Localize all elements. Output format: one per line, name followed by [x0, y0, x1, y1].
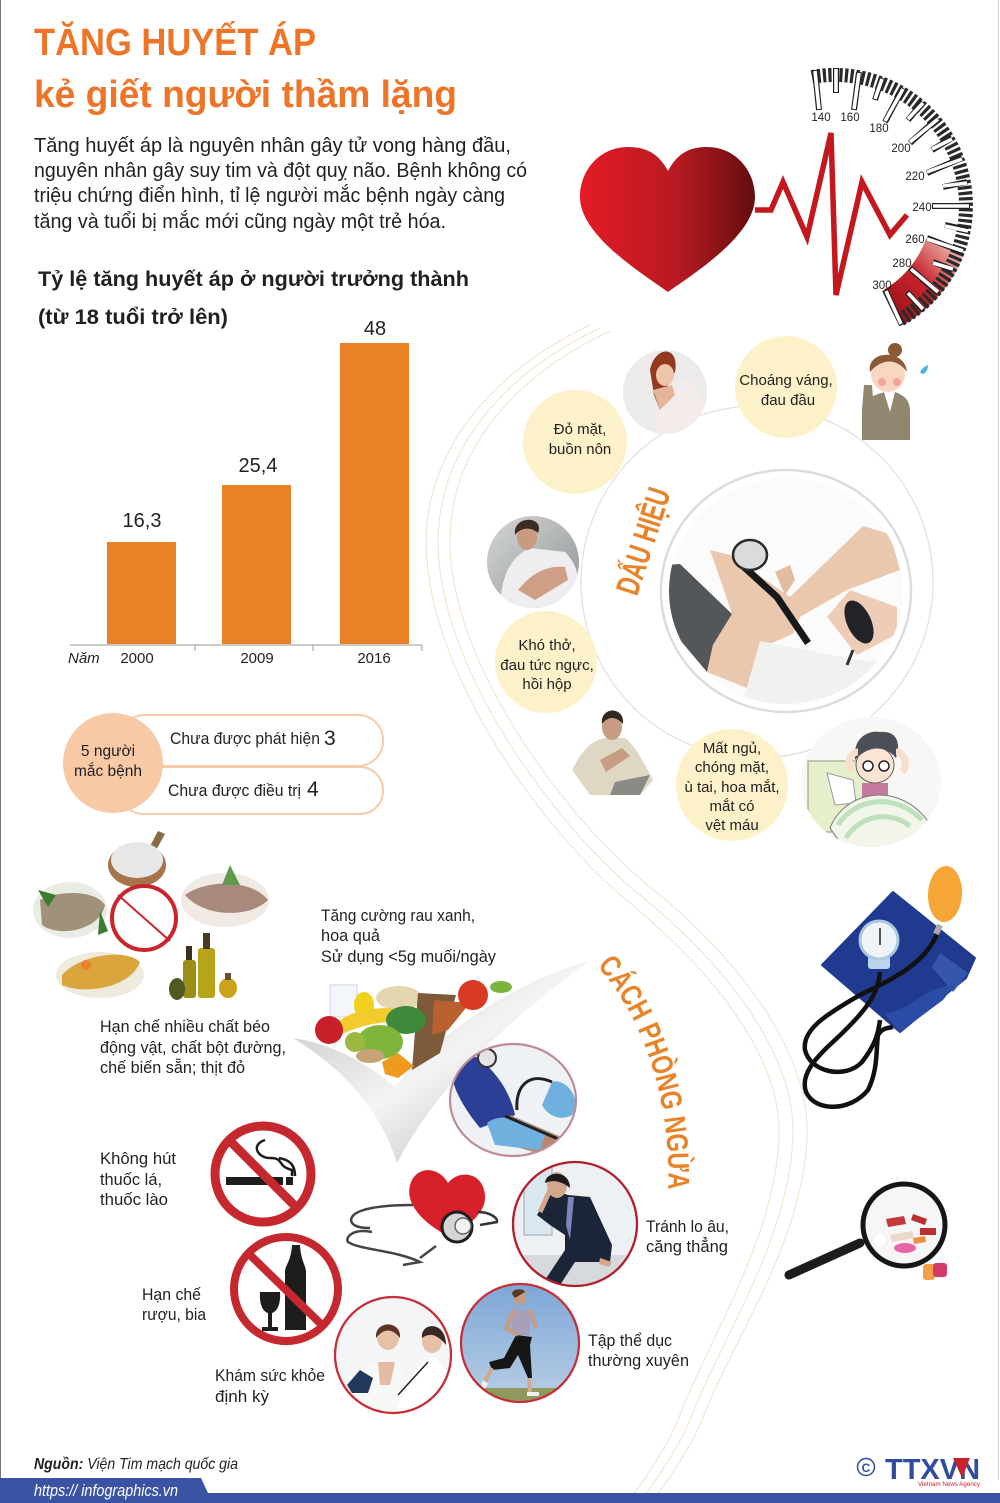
text: exercise: [588, 1332, 689, 1370]
icon: sphygmomanometer: [805, 865, 975, 1107]
text: avoid stress: [646, 1218, 729, 1256]
text: restrict fats: Hạn chế nhiều chất béo: [100, 1018, 270, 1036]
icon: magnifying glass with pills: [789, 1184, 947, 1280]
intro paragraph: nguyên nhân gây suy tim và đột quỵ não. Bệnh không có: [34, 160, 527, 182]
text: regular check-ups: Khám sức khỏe: [215, 1367, 325, 1385]
bar chart: 16,3: [123, 510, 161, 532]
gauge numbers: 180: [869, 123, 889, 135]
salt bowl: [148, 831, 165, 854]
callout: 5 people with hypertension: Chưa được phát hiện: [170, 730, 320, 748]
text: no smoking: thuốc lá,: [100, 1171, 162, 1189]
source note: Nguồn: Viện Tim mạch quốc gia: [34, 1456, 238, 1473]
title: [34, 20, 457, 116]
logo: TTXVN: C: [862, 1461, 871, 1475]
chart heading: [38, 268, 469, 329]
heart: [580, 147, 755, 292]
red zone of gauge: [884, 239, 964, 325]
sleeve: [665, 564, 732, 672]
icon: no smoking: [215, 1126, 311, 1222]
prohibition ring: [112, 886, 176, 950]
logo: TTXVN: TTXVN: [885, 1454, 980, 1486]
icon: check mark with healthy food: [293, 960, 592, 1163]
text: limit alcohol: [142, 1286, 207, 1324]
intro paragraph: [34, 135, 527, 233]
callout: 5 people with hypertension: 3: [324, 727, 336, 750]
gauge numbers: [811, 112, 932, 292]
title: kẻ giết người thầm lặng: [34, 74, 457, 116]
gauge numbers: 200: [891, 143, 911, 155]
bar chart: [68, 318, 422, 667]
text: more vegetables: Tăng cường rau xanh,: [321, 907, 475, 925]
text: no smoking: thuốc lào: [100, 1191, 168, 1209]
yellow bubble: flushed face, nausea: buồn nôn: [549, 441, 611, 458]
yellow bubble: dizziness, headache: đau đầu: [761, 392, 815, 409]
yellow bubble: breathlessness, chest pain: [495, 611, 597, 713]
yellow bubble: insomnia, vertigo: Mất ngủ,: [703, 740, 761, 757]
bar chart: 2000: [120, 650, 154, 667]
text: restrict fats: chế biến sẵn; thịt đỏ: [100, 1058, 245, 1077]
symptoms ring: [581, 406, 933, 758]
photo: doctor checking patient: [335, 1297, 452, 1413]
gauge major ticks: [815, 68, 970, 325]
text: limit alcohol: Hạn chế: [142, 1286, 201, 1304]
yellow bubble: flushed face, nausea: Đỏ mặt,: [554, 421, 606, 438]
photo: sleepless person in bed: [801, 717, 941, 850]
ECG line: [755, 133, 907, 295]
symptoms heading: DẤU HIỆU: [608, 483, 678, 599]
callout: 5 people with hypertension: 5 người: [81, 743, 135, 760]
arm and hand: [707, 526, 900, 688]
callout: 5 people with hypertension: mắc bệnh: [74, 763, 142, 780]
photo: stressed businessman: [512, 1162, 642, 1295]
yellow bubble: dizziness, headache: [735, 336, 837, 438]
gauge numbers: 140: [811, 112, 831, 124]
gauge: [743, 566, 808, 643]
text: regular check-ups: [215, 1367, 325, 1406]
text: more vegetables: [321, 907, 497, 966]
bar chart: Năm: [68, 650, 100, 667]
icon: foods to restrict: [33, 831, 269, 1000]
yellow bubble: insomnia, vertigo: mắt có: [709, 798, 755, 815]
yellow bubble: insomnia, vertigo: vệt máu: [705, 817, 759, 834]
text: limit alcohol: rượu, bia: [142, 1306, 207, 1324]
gauge numbers: 260: [905, 234, 925, 246]
panel: symptoms: [486, 336, 941, 850]
text: restrict fats: [100, 1018, 286, 1077]
title: TĂNG HUYẾT ÁP: [34, 20, 316, 64]
yellow bubble: insomnia, vertigo: [676, 729, 788, 841]
salad plate left: [33, 882, 107, 938]
photo: man with chest pain: [486, 516, 580, 612]
text: regular check-ups: định kỳ: [215, 1388, 270, 1406]
photo: blood pressure measurement: [660, 470, 912, 712]
food pile: [376, 986, 422, 1010]
text: avoid stress: Tránh lo âu,: [646, 1218, 729, 1236]
callout: 5 people with hypertension: 4: [307, 778, 319, 801]
intro paragraph: tăng và tuổi bị mắc mới cũng ngày một trẻ hóa.: [34, 210, 446, 233]
icon: no alcohol: [234, 1237, 338, 1341]
bar chart: 2009: [240, 650, 274, 667]
text: no smoking: Không hút: [100, 1150, 176, 1168]
footer bar with URL: https:// infographics.vn: [34, 1481, 178, 1500]
photo: man coughing at desk: [572, 710, 653, 795]
bar chart: 48: [364, 318, 386, 340]
photo: runner: [460, 1284, 580, 1408]
oil bottles: [198, 948, 215, 998]
yellow bubble: breathlessness, chest pain: đau tức ngực,: [500, 657, 594, 674]
footer bar with URL: [0, 1478, 1000, 1503]
text: exercise: Tập thể dục: [588, 1332, 672, 1350]
callout: 5 people with hypertension: [63, 713, 383, 814]
chicken plate: [56, 952, 144, 998]
yellow bubble: insomnia, vertigo: ù tai, hoa mắt,: [684, 779, 780, 796]
yellow bubble: breathlessness, chest pain: Khó thở,: [518, 637, 576, 654]
gauge numbers: 300: [872, 280, 892, 292]
panel: prevention: [33, 831, 729, 1414]
text: no smoking: [100, 1150, 176, 1209]
text: restrict fats: động vật, chất bột đường,: [100, 1039, 286, 1057]
text: avoid stress: căng thẳng: [646, 1237, 728, 1256]
text: more vegetables: hoa quả: [321, 927, 381, 945]
icon: woman with headache: [862, 343, 928, 440]
gauge numbers: 220: [905, 171, 925, 183]
photo: blood pressure check with gloves: [450, 1044, 580, 1160]
gauge numbers: 240: [912, 202, 932, 214]
text: exercise: thường xuyên: [588, 1352, 689, 1370]
text: more vegetables: Sử dụng <5g muối/ngày: [321, 948, 497, 966]
decorative curved lines: [426, 325, 807, 1503]
prevention heading: CÁCH PHÒNG NGỪA: [600, 956, 695, 1189]
gauge minor ticks: [812, 75, 966, 319]
photo: nauseous woman: [623, 350, 707, 434]
callout: 5 people with hypertension: Chưa được điều trị: [168, 782, 301, 800]
chart heading: Tỷ lệ tăng huyết áp ở người trưởng thành: [38, 268, 469, 291]
icon: heart, ECG and pressure gauge: [580, 68, 970, 325]
right hand: [827, 590, 897, 655]
gauge numbers: 280: [892, 258, 912, 270]
chart heading: (từ 18 tuổi trở lên): [38, 306, 228, 329]
icon: heart with stethoscope: [347, 1170, 497, 1265]
bar chart: 2016: [357, 650, 391, 667]
gauge numbers: 160: [840, 112, 860, 124]
intro paragraph: triệu chứng điển hình, tỉ lệ người mắc bệnh ngày càng: [34, 184, 505, 207]
yellow bubble: breathlessness, chest pain: hồi hộp: [522, 676, 572, 693]
coat: [744, 641, 876, 704]
yellow bubble: dizziness, headache: Choáng váng,: [739, 372, 833, 389]
meat plate right: [181, 873, 269, 927]
yellow bubble: insomnia, vertigo: chóng mặt,: [695, 759, 769, 776]
tubes: [805, 932, 938, 1107]
bar chart: 25,4: [239, 455, 277, 477]
intro paragraph: Tăng huyết áp là nguyên nhân gây tử vong hàng đầu,: [34, 135, 511, 157]
logo: TTXVN: Vietnam News Agency: [918, 1481, 981, 1488]
yellow bubble: flushed face, nausea: [523, 390, 627, 494]
